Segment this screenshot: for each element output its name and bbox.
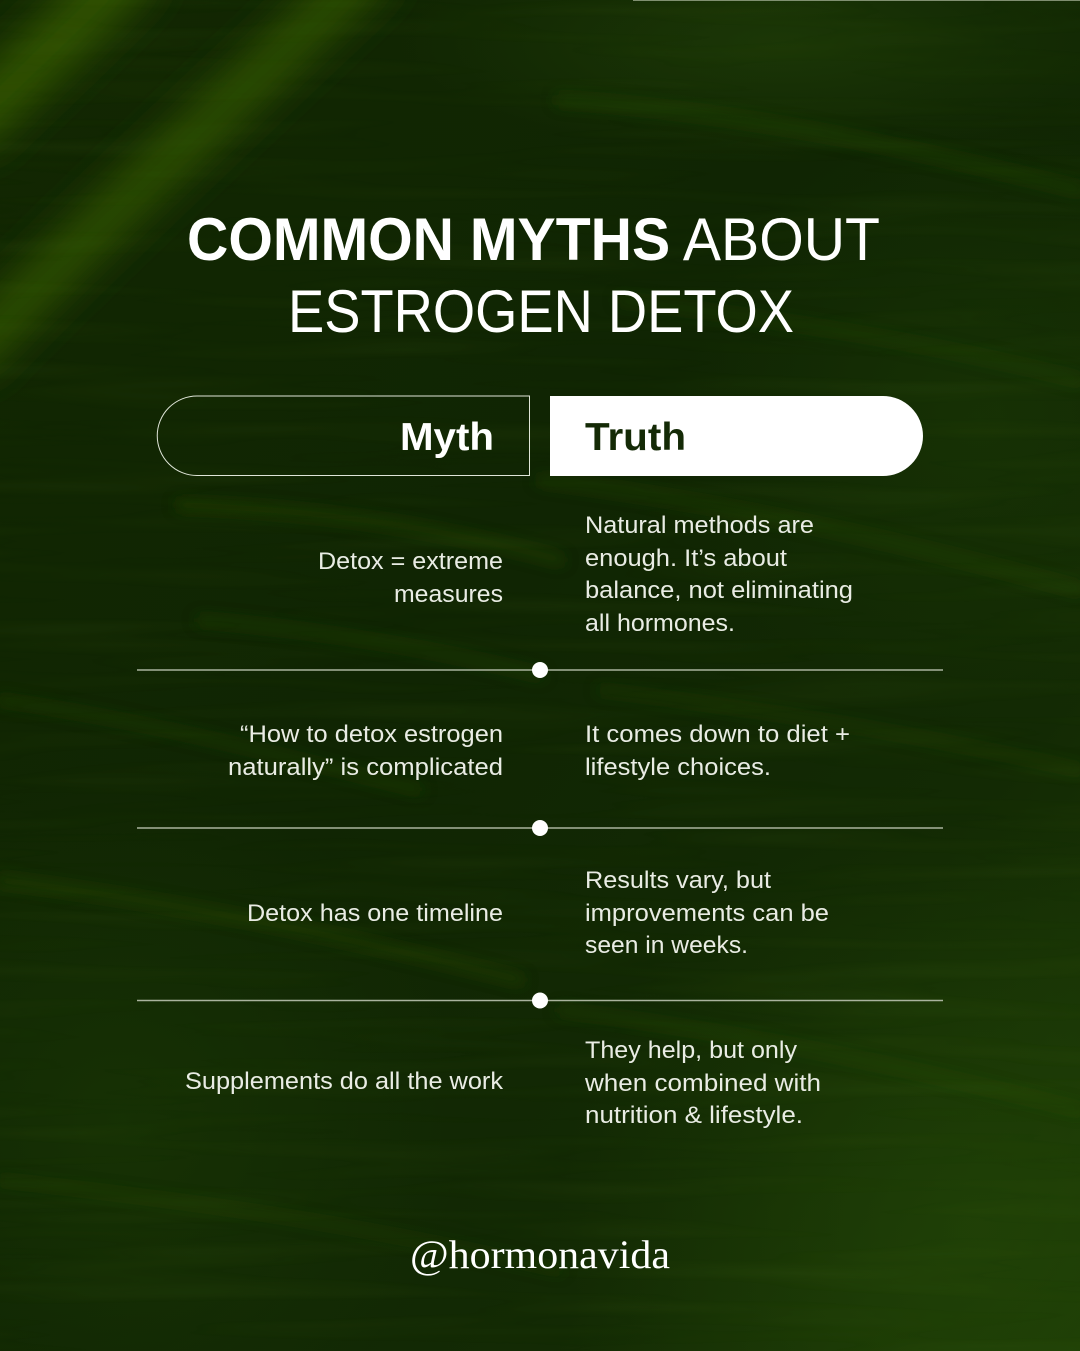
myth 1 text: [318, 548, 503, 608]
truth 4 text: [584, 1037, 821, 1129]
truth 3 text: Results vary, but: [585, 867, 771, 894]
footer handle: @hormonavida: [410, 1232, 670, 1277]
column header: Myth: Myth: [400, 416, 494, 459]
column header: Truth: Truth: [585, 416, 686, 459]
truth 3 text: seen in weeks.: [585, 932, 748, 959]
truth 1 text: Natural methods are: [585, 512, 814, 539]
divider 1: [137, 662, 943, 678]
myth 1 text: Detox = extreme: [318, 548, 503, 575]
truth 2 text: lifestyle choices.: [585, 754, 771, 781]
myth 4 text: Supplements do all the work: [185, 1068, 504, 1095]
truth 3 text: [585, 867, 829, 959]
truth 3 text: improvements can be: [585, 900, 829, 927]
myth 3 text: Detox has one timeline: [247, 900, 503, 927]
truth 1 text: enough. It’s about: [585, 545, 787, 572]
title: ESTROGEN DETOX: [288, 278, 794, 345]
divider 3: [137, 992, 943, 1008]
title: [187, 206, 880, 345]
truth 4 text: when combined with: [584, 1070, 821, 1097]
title: COMMON MYTHS ABOUT: [187, 206, 880, 273]
truth 1 text: [585, 512, 853, 637]
column header: Myth: [157, 396, 529, 476]
truth 2 text: [585, 721, 850, 781]
truth 1 text: balance, not eliminating: [585, 577, 853, 604]
divider 2: [137, 820, 943, 836]
truth 4 text: They help, but only: [585, 1037, 798, 1064]
column header: Truth: [550, 396, 923, 476]
row 1: [318, 512, 853, 637]
myth 2 text: naturally” is complicated: [228, 754, 503, 781]
row 4: [185, 1037, 821, 1129]
myth 2 text: [228, 721, 503, 781]
truth 1 text: all hormones.: [585, 610, 735, 637]
truth 4 text: nutrition & lifestyle.: [585, 1102, 803, 1129]
myth 1 text: measures: [394, 581, 503, 608]
row 2: [228, 721, 850, 781]
myth 2 text: “How to detox estrogen: [240, 721, 503, 748]
row 3: [247, 867, 829, 959]
truth 2 text: It comes down to diet +: [585, 721, 850, 748]
